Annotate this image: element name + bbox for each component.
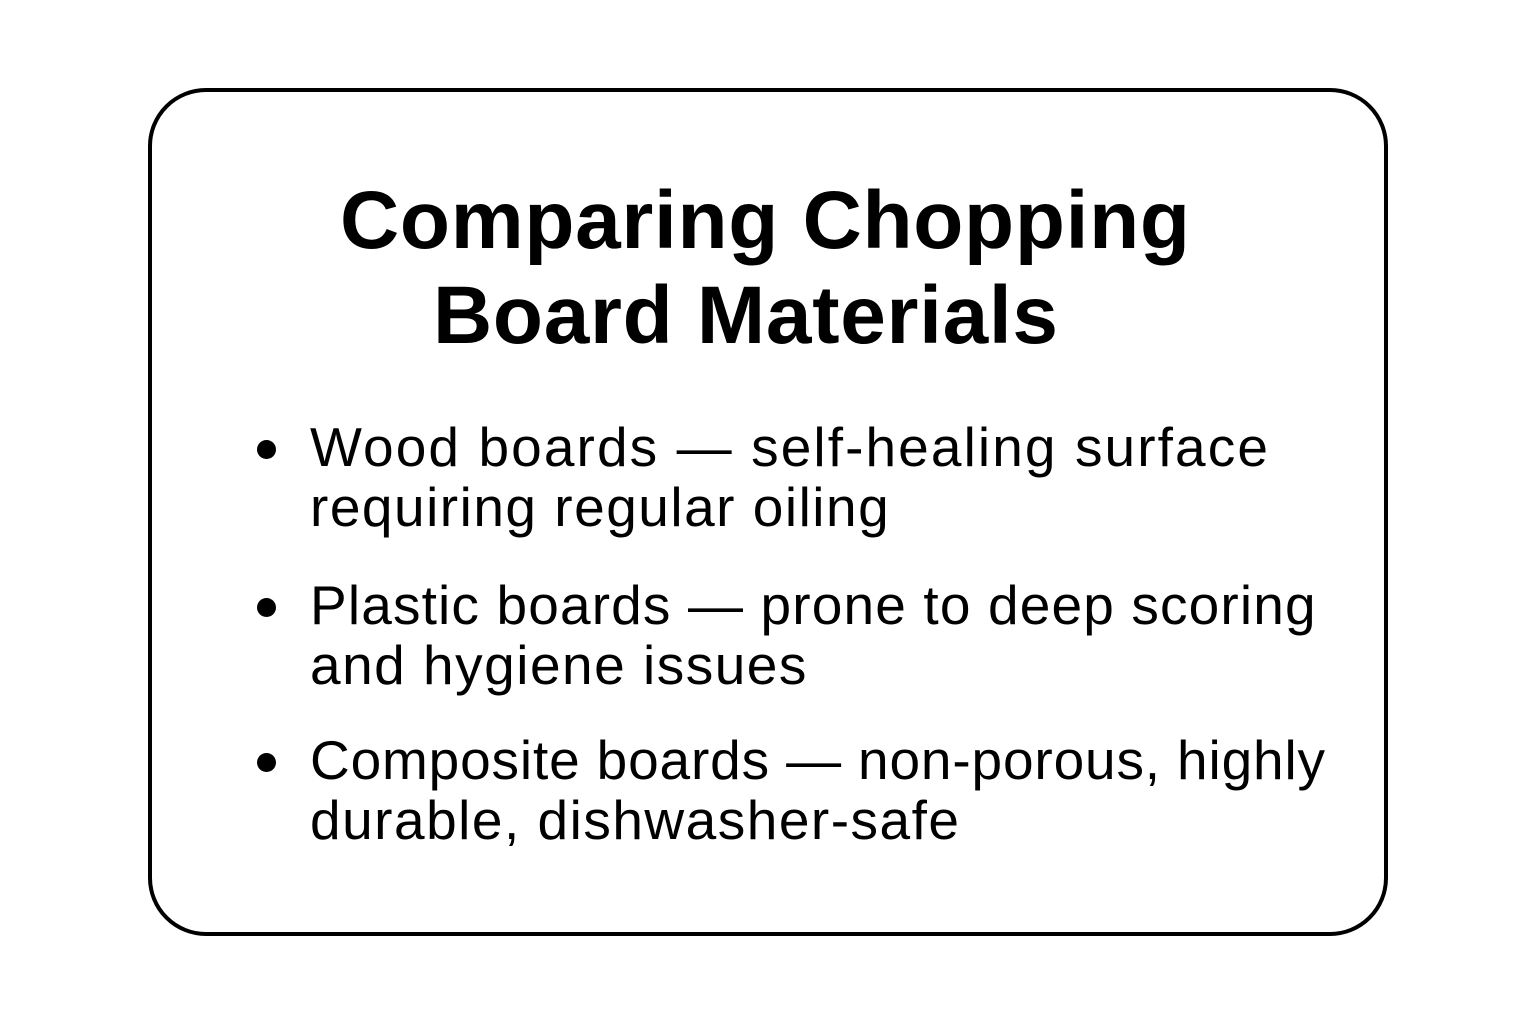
bullet: wood boards: requiring regular oiling [310,476,890,538]
bullet: wood boards: Wood boards — self-healing surface [310,416,1270,478]
bullet: plastic boards: Plastic boards — prone to deep scoring [310,574,1317,636]
panel: card frame [148,88,1388,936]
title: Board Materials [433,270,1059,361]
bullet: composite boards: Composite boards — non-porous, highly [310,729,1326,791]
title [340,175,1191,361]
bullet: plastic boards: and hygiene issues [310,634,808,696]
bullet: composite boards [257,729,1326,851]
bullet: wood boards [257,416,1270,538]
title: Comparing Chopping [340,175,1191,266]
bullet: composite boards: durable, dishwasher-safe [310,789,961,851]
bullet: plastic boards [257,574,1317,696]
